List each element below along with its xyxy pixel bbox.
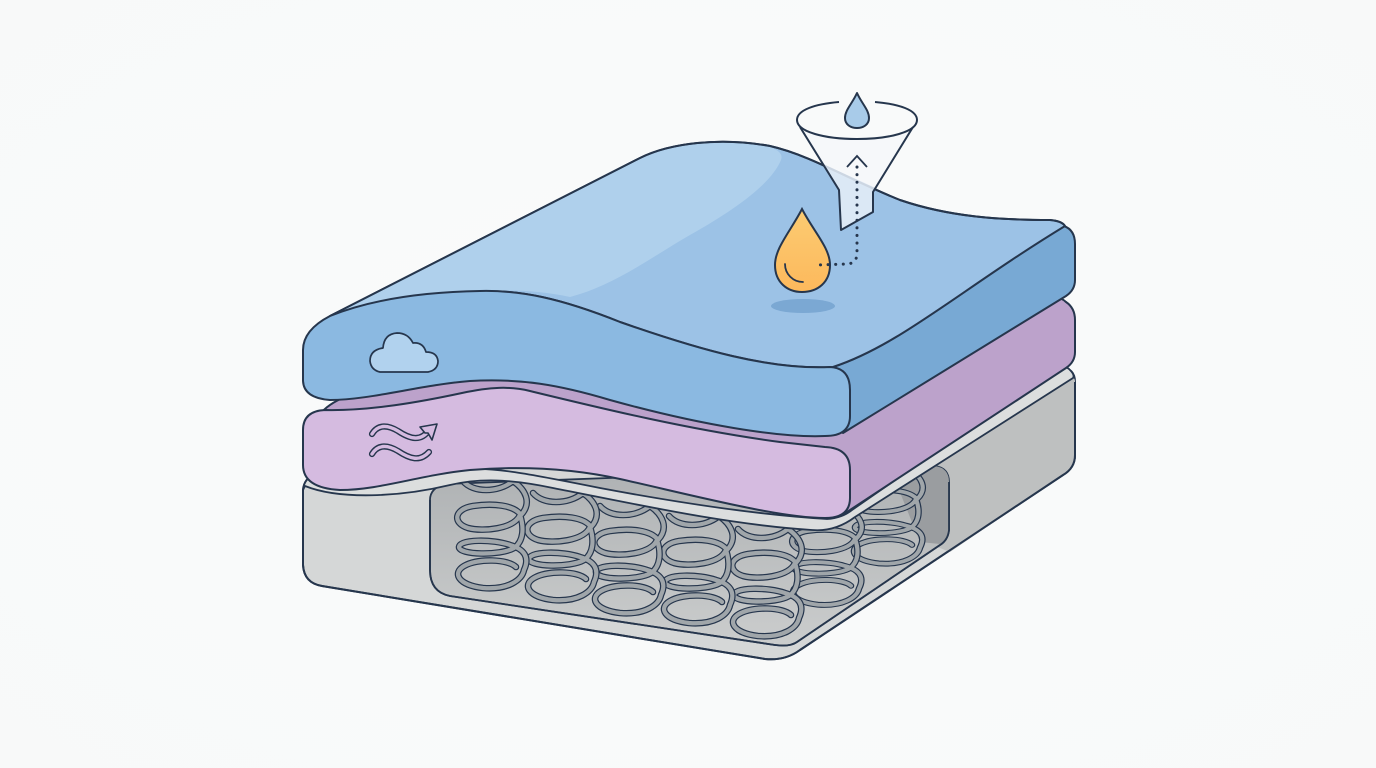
middle layer: purple comfort foam — [303, 298, 1075, 518]
purple front face — [303, 388, 850, 518]
icon: cloud — [370, 333, 438, 372]
infographic: layered mattress illustration — [302, 92, 1076, 660]
funnel lower tint — [823, 164, 876, 230]
springs — [457, 469, 923, 636]
arrow: dotted path from droplet through funnel — [815, 156, 867, 265]
base body — [303, 367, 1075, 659]
funnel filter — [797, 93, 917, 230]
funnel body — [798, 121, 916, 230]
cavity back wall — [895, 466, 949, 544]
blue top surface — [330, 142, 1065, 367]
oil droplet with shadow — [771, 209, 835, 313]
funnel outline — [800, 127, 913, 230]
cavity outline — [430, 482, 949, 646]
surface outline — [330, 142, 1065, 316]
top layer: blue memory foam — [303, 142, 1075, 436]
base top strip — [303, 367, 1074, 530]
purple side and back rim — [322, 298, 1075, 518]
spring cavity — [430, 466, 949, 646]
base layer: spring unit — [303, 367, 1075, 659]
icon: oil droplet — [775, 209, 830, 292]
droplet smile — [785, 264, 803, 282]
base right side — [920, 378, 1075, 552]
droplet shadow — [771, 299, 835, 313]
blue front face — [303, 291, 850, 436]
blue right side — [830, 226, 1075, 433]
icon: clean droplet — [845, 93, 869, 128]
surface highlight — [332, 143, 782, 315]
funnel rim — [797, 102, 917, 139]
icon: airflow waves — [372, 424, 437, 458]
